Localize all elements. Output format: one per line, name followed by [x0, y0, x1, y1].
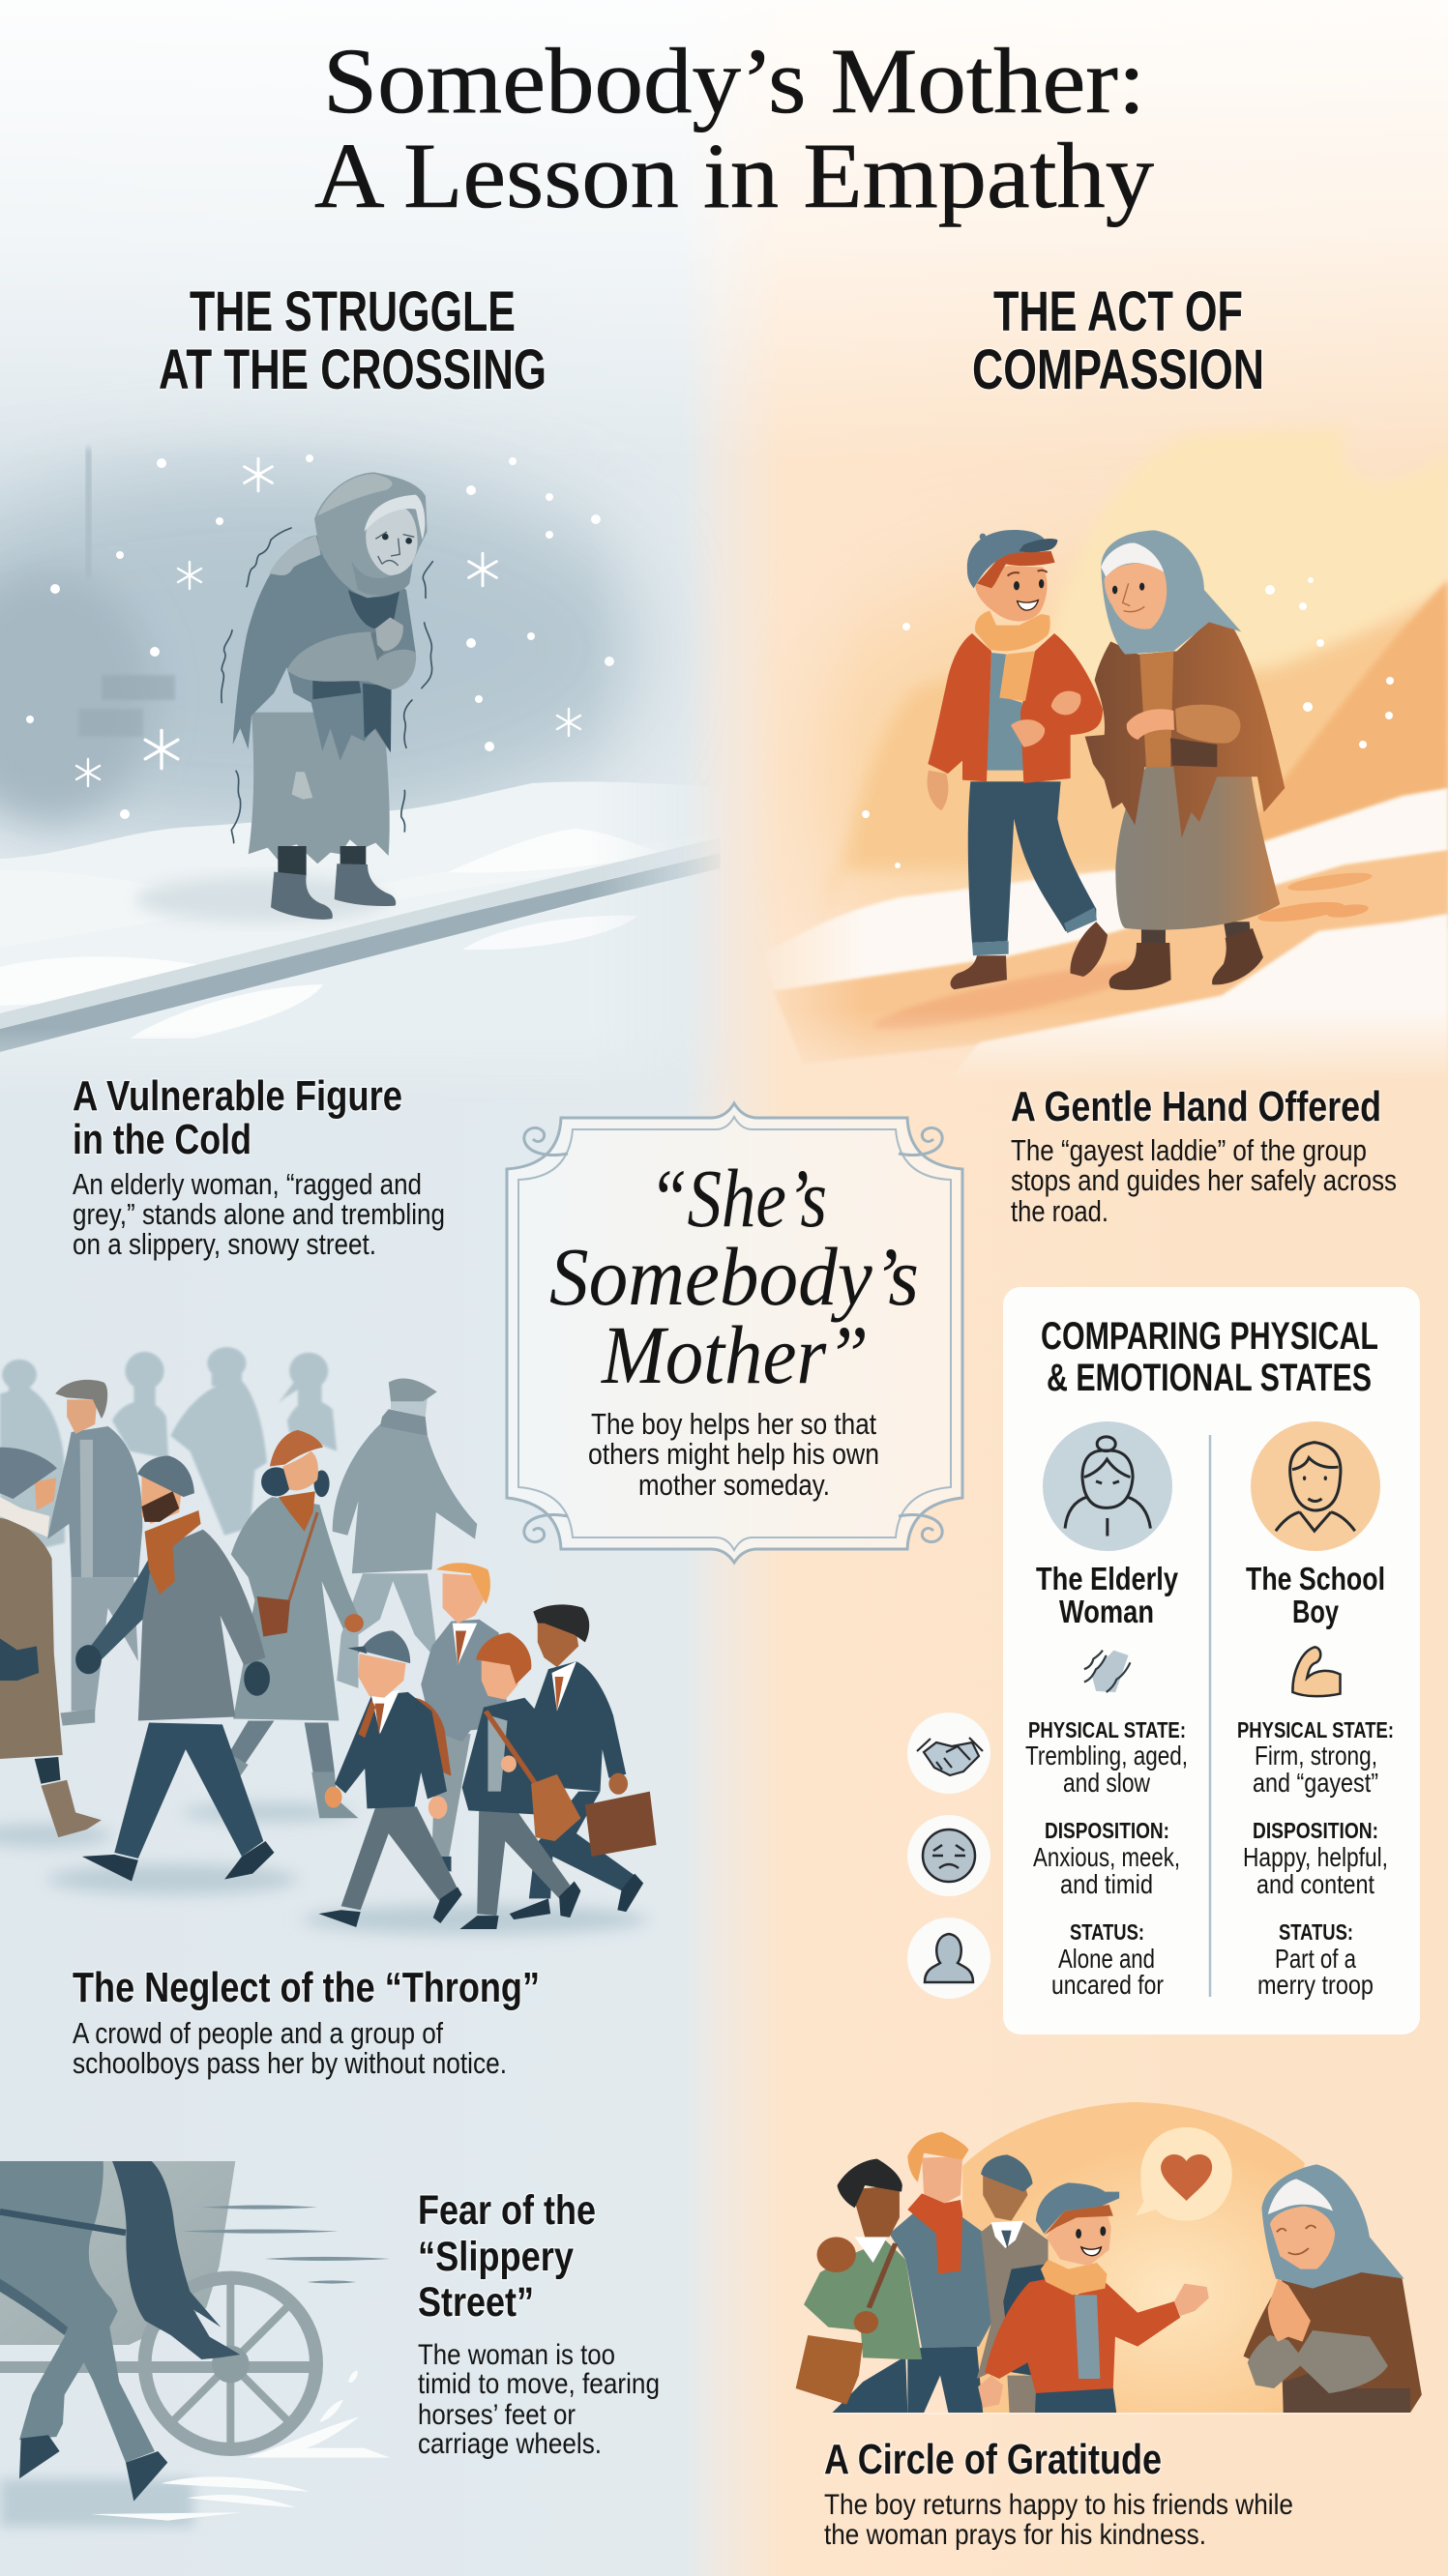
column: the school boy: Firm, strong, — [1255, 1741, 1377, 1771]
title: A Lesson in Empathy — [314, 124, 1154, 227]
figure: old woman — [1085, 530, 1285, 990]
text: fear of the slippery street: Street” — [418, 2279, 534, 2326]
column: the elderly woman: Woman — [1059, 1594, 1154, 1629]
dark-haired schoolboy with briefcase — [510, 1604, 657, 1919]
text: fear of the slippery street: “Slippery — [418, 2234, 574, 2280]
figure: boy — [928, 530, 1108, 989]
horse legs and body — [0, 2269, 71, 2335]
figure: trembling old woman — [222, 472, 432, 920]
column: the elderly woman — [1025, 1561, 1188, 2000]
ground shadows — [0, 1802, 648, 1935]
heading: the act of compassion: THE ACT OF — [993, 280, 1243, 343]
text: fear of the slippery street: The woman is too — [418, 2339, 615, 2371]
text: fear of the slippery street: horses’ feet or — [418, 2399, 576, 2431]
column: the elderly woman: The Elderly — [1036, 1561, 1179, 1596]
tremble lines — [222, 528, 432, 843]
icon: handshake — [907, 1712, 990, 1794]
text: the neglect of the throng: The Neglect of the “Throng” — [73, 1964, 540, 2011]
woman in orange hat — [229, 1430, 364, 1818]
title — [314, 29, 1154, 227]
snow splash — [90, 2371, 390, 2521]
text: a vulnerable figure in the cold — [73, 1072, 445, 1261]
column: the school boy — [1237, 1561, 1394, 2000]
icon: lone person — [907, 1917, 990, 1999]
column: the elderly woman: Trembling, aged, — [1025, 1741, 1188, 1771]
quote panel: Mother” — [600, 1308, 869, 1401]
title: Somebody’s Mother: — [323, 29, 1145, 132]
text: a circle of gratitude: the woman prays for his kindness. — [824, 2519, 1206, 2551]
column: the school boy: merry troop — [1257, 1970, 1374, 2000]
illustration: boy helping the old woman across the road — [764, 427, 1448, 1102]
illustration: circle of gratitude — [796, 2102, 1422, 2414]
quote panel: Somebody’s — [549, 1230, 919, 1323]
icon: elderly woman portrait — [1043, 1421, 1172, 1551]
friend in sweater — [977, 2154, 1049, 2413]
icon: school boy portrait — [1251, 1421, 1380, 1551]
carriage wheel — [0, 2278, 322, 2449]
column: the school boy: PHYSICAL STATE: — [1237, 1717, 1394, 1742]
grey man with cap — [47, 1380, 142, 1726]
heading: the struggle at the crossing: AT THE CROSSING — [159, 338, 547, 401]
heading: the struggle at the crossing: THE STRUGGLE — [190, 280, 516, 343]
quote panel: “She’s — [649, 1152, 827, 1244]
text: the neglect of the throng: A crowd of people and a group of — [73, 2016, 443, 2050]
blond schoolboy — [421, 1563, 510, 1872]
card title — [1041, 1315, 1378, 1399]
text: the neglect of the throng: schoolboys pass her by without notice. — [73, 2046, 507, 2080]
schoolboy with cap and backpack — [318, 1631, 462, 1927]
speed lines — [182, 2205, 390, 2284]
column: the school boy: The School — [1246, 1561, 1385, 1596]
column: the school boy: and content — [1256, 1869, 1374, 1899]
quote panel: The boy helps her so that — [591, 1407, 876, 1441]
text: fear of the slippery street: Fear of the — [418, 2187, 596, 2234]
column: the elderly woman: and timid — [1060, 1869, 1153, 1899]
text: the neglect of the throng — [73, 1964, 540, 2080]
praying old woman — [1244, 2164, 1422, 2413]
column: the elderly woman: PHYSICAL STATE: — [1028, 1717, 1186, 1742]
heading: the act of compassion — [972, 280, 1264, 401]
column: the elderly woman: Alone and — [1058, 1944, 1155, 1974]
distant silhouettes — [0, 1347, 337, 1558]
text: a vulnerable figure in the cold: A Vulnerable Figure — [73, 1072, 402, 1120]
icon: trembling — [1084, 1651, 1130, 1692]
column: the school boy: STATUS: — [1279, 1919, 1353, 1945]
quote panel: others might help his own — [588, 1437, 879, 1471]
text: a circle of gratitude: A Circle of Gratitude — [824, 2436, 1162, 2483]
text: a gentle hand offered — [1011, 1083, 1397, 1228]
column: the school boy: Boy — [1292, 1594, 1339, 1629]
happy boy — [978, 2182, 1209, 2413]
quote panel: mother someday. — [638, 1468, 830, 1502]
text: a circle of gratitude: The boy returns happy to his friends while — [824, 2489, 1293, 2521]
friend with scarf — [889, 2132, 991, 2413]
column: the school boy: and “gayest” — [1253, 1768, 1378, 1798]
friend in green sweater — [796, 2159, 922, 2413]
column: the school boy: DISPOSITION: — [1253, 1818, 1378, 1843]
text: a gentle hand offered: the road. — [1011, 1194, 1108, 1228]
red-haired schoolboy with satchel — [459, 1633, 580, 1929]
speech bubble with heart — [1136, 2127, 1232, 2221]
woman in brown coat — [0, 1448, 102, 1837]
illustration: crowd and schoolboys passing by — [0, 1347, 657, 1935]
quote panel — [507, 1103, 962, 1563]
bearded man with scarf — [75, 1455, 274, 1882]
heading: the act of compassion: COMPASSION — [972, 338, 1264, 401]
column: the elderly woman: DISPOSITION: — [1045, 1818, 1169, 1843]
icon: flexed arm — [1292, 1647, 1341, 1696]
column: the elderly woman: uncared for — [1051, 1970, 1164, 2000]
column: the school boy: Happy, helpful, — [1243, 1842, 1388, 1872]
text: a vulnerable figure in the cold: grey,” stands alone and trembling — [73, 1197, 445, 1231]
icon: anxious face — [907, 1815, 990, 1896]
heading: the struggle at the crossing — [159, 280, 547, 401]
comparison card — [907, 1287, 1420, 2034]
grey figure from behind — [333, 1378, 477, 1688]
column: the elderly woman: Anxious, meek, — [1033, 1842, 1180, 1872]
text: fear of the slippery street: carriage wheels. — [418, 2428, 602, 2460]
text: a gentle hand offered: The “gayest laddie” of the group — [1011, 1133, 1367, 1167]
text: a vulnerable figure in the cold: in the Cold — [73, 1116, 251, 1163]
text: fear of the slippery street — [418, 2187, 660, 2460]
text: a vulnerable figure in the cold: on a slippery, snowy street. — [73, 1227, 376, 1261]
illustration: elderly woman on the snowy street — [0, 448, 735, 1102]
text: fear of the slippery street: timid to move, fearing — [418, 2368, 660, 2400]
column: the school boy: Part of a — [1275, 1944, 1356, 1974]
illustration: horse and carriage — [0, 2161, 390, 2527]
text: a circle of gratitude — [824, 2436, 1293, 2551]
column: the elderly woman: STATUS: — [1070, 1919, 1144, 1945]
text: a vulnerable figure in the cold: An elderly woman, “ragged and — [73, 1167, 422, 1201]
column: the elderly woman: and slow — [1063, 1768, 1151, 1798]
